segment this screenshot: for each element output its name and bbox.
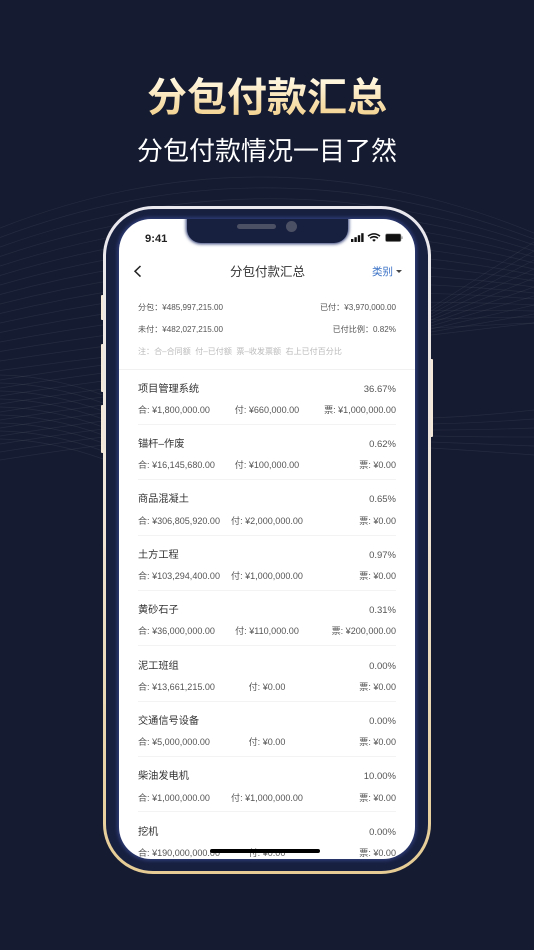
row: 锚杆-作废: 票: ¥0.00 — [359, 460, 396, 470]
row: 项目管理系统: 票: ¥1,000,000.00 — [324, 405, 396, 415]
row: 交通信号设备 — [138, 715, 396, 757]
row: 项目管理系统: 项目管理系统 — [138, 384, 199, 395]
home indicator — [210, 849, 320, 852]
row: 交通信号设备: 合: ¥5,000,000.00 — [138, 737, 210, 747]
row: 柴油发电机: 柴油发电机 — [138, 771, 189, 782]
row: 挖机 — [138, 826, 396, 858]
row: 挖机: 合: ¥190,000,000.00 — [138, 848, 220, 858]
row: 柴油发电机 — [138, 770, 396, 812]
row: 黄砂石子: 0.31% — [369, 605, 396, 616]
notch — [187, 217, 348, 243]
back chevron — [134, 266, 141, 278]
row: 锚杆-作废: 合: ¥16,145,680.00 — [138, 460, 215, 470]
row: 交通信号设备: 票: ¥0.00 — [359, 737, 396, 747]
row: 锚杆-作废: 付: ¥100,000.00 — [235, 460, 299, 470]
status bar icons — [351, 233, 403, 242]
row: 土方工程: 付: ¥1,000,000.00 — [231, 571, 303, 581]
row: 泥工班组: 票: ¥0.00 — [359, 682, 396, 692]
summary block: 分包：¥485,997,215.00 — [138, 303, 223, 312]
row: 商品混凝土: 商品混凝土 — [138, 494, 189, 505]
row: 黄砂石子: 付: ¥110,000.00 — [235, 626, 299, 636]
subtitle: 分包付款情况一目了然 — [137, 136, 397, 166]
summary block: 未付：¥482,027,215.00 — [138, 325, 223, 334]
row: 商品混凝土: 0.65% — [369, 494, 396, 505]
row: 项目管理系统: 合: ¥1,800,000.00 — [138, 405, 210, 415]
screen heading: 分包付款汇总 — [230, 265, 305, 279]
row: 挖机: 挖机 — [138, 827, 158, 838]
row: 黄砂石子 — [138, 604, 396, 646]
row: 交通信号设备: 付: ¥0.00 — [249, 737, 285, 747]
row: 黄砂石子: 合: ¥36,000,000.00 — [138, 626, 215, 636]
row: 锚杆-作废: 锚杆–作废 — [138, 439, 184, 450]
row: 挖机: 付: ¥0.00 — [249, 848, 285, 858]
row: 泥工班组: 合: ¥13,661,215.00 — [138, 682, 215, 692]
row: 泥工班组: 付: ¥0.00 — [249, 682, 285, 692]
row: 商品混凝土: 票: ¥0.00 — [359, 516, 396, 526]
row: 商品混凝土 — [138, 493, 396, 536]
title: 分包付款汇总 — [147, 76, 387, 120]
row: 柴油发电机: 票: ¥0.00 — [359, 793, 396, 803]
row: 交通信号设备: 交通信号设备 — [138, 716, 199, 727]
row: 商品混凝土: 合: ¥306,805,920.00 — [138, 516, 220, 526]
row: 柴油发电机: 付: ¥1,000,000.00 — [231, 793, 303, 803]
row: 锚杆-作废 — [138, 438, 396, 480]
title — [0, 69, 534, 127]
row: 泥工班组: 0.00% — [369, 661, 396, 672]
row: 柴油发电机: 合: ¥1,000,000.00 — [138, 793, 210, 803]
row: 项目管理系统: 36.67% — [364, 384, 396, 395]
row: 黄砂石子: 票: ¥200,000.00 — [332, 626, 396, 636]
row: 泥工班组: 泥工班组 — [138, 661, 179, 672]
summary block: 已付：¥3,970,000.00 — [320, 303, 396, 312]
section divider — [119, 369, 415, 370]
row: 黄砂石子: 黄砂石子 — [138, 605, 179, 616]
row: 挖机: 0.00% — [369, 827, 396, 838]
row: 土方工程: 土方工程 — [138, 550, 179, 561]
row: 挖机: 票: ¥0.00 — [359, 848, 396, 858]
row: 泥工班组 — [138, 660, 396, 702]
row: 商品混凝土: 付: ¥2,000,000.00 — [231, 516, 303, 526]
row: 土方工程: 0.97% — [369, 550, 396, 561]
row: 土方工程: 票: ¥0.00 — [359, 571, 396, 581]
row: 锚杆-作废: 0.62% — [369, 439, 396, 450]
row: 土方工程 — [138, 549, 396, 591]
phone screen — [119, 219, 415, 859]
row: 项目管理系统 — [138, 383, 396, 425]
row: 项目管理系统: 付: ¥660,000.00 — [235, 405, 299, 415]
row: 柴油发电机: 10.00% — [364, 771, 396, 782]
row: 交通信号设备: 0.00% — [369, 716, 396, 727]
summary block — [138, 303, 396, 356]
category filter: 类别 — [372, 266, 393, 278]
status bar time: 9:41 — [145, 233, 167, 245]
summary block: 注：合–合同额 付–已付额 票–收发票额 右上已付百分比 — [138, 347, 342, 356]
summary block: 已付比例：0.82% — [333, 325, 396, 334]
row: 土方工程: 合: ¥103,294,400.00 — [138, 571, 220, 581]
